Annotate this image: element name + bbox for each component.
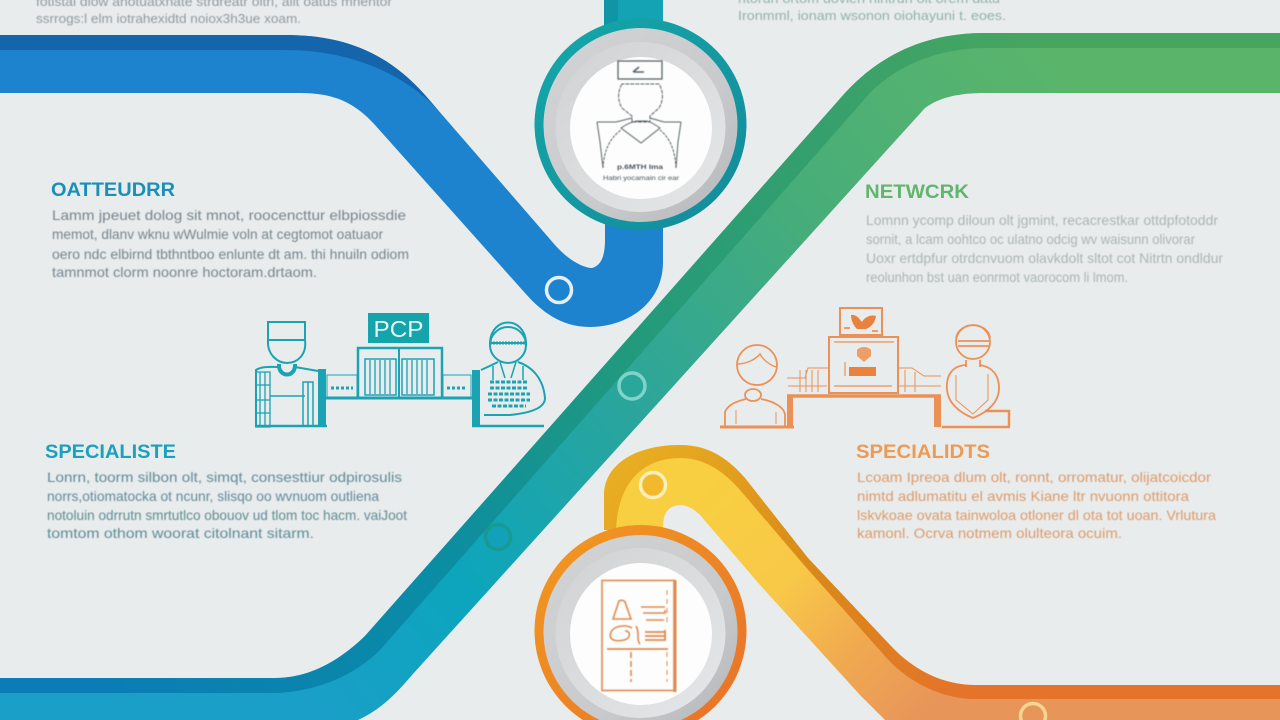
body text: reolunhon bst uan eonrmot vaorocom li lmom. xyxy=(866,269,1128,285)
body text xyxy=(866,212,1223,285)
body text: kamonl. Ocrva notmem olulteora ocuim. xyxy=(857,525,1122,541)
body text: Lamm jpeuet dolog sit mnot, roocencttur elbpiossdie xyxy=(52,207,406,223)
icon: person with badge xyxy=(597,61,681,182)
node ring: yellow band xyxy=(640,472,666,498)
text block: top right fragment: Ironmml, ionam wsonon oiohayuni t. eoes. xyxy=(738,9,1006,23)
text block: top left fragment: ssrrogs:l elm iotrahexidtd noiox3h3ue xoam. xyxy=(36,12,301,26)
node ring: diagonal upper xyxy=(619,373,645,399)
body text: oero ndc elbirnd tbthntboo enlunte dt am. thi hnuiln odiom xyxy=(52,246,409,262)
bottom medallion xyxy=(534,525,746,720)
heading: SPECIALIDTS xyxy=(856,442,990,463)
body text: lskvkoae ovata tainwoloa otloner dl ota tot uoan. Vrlutura xyxy=(857,507,1216,523)
text block: top left fragment xyxy=(36,0,392,26)
body text xyxy=(52,207,409,280)
body text: tamnmot clorm noonre hoctoram.drtaom. xyxy=(52,264,317,280)
text block: top right fragment xyxy=(738,0,1006,23)
body text: tomtom othom woorat citolnant sitarm. xyxy=(47,525,314,541)
heading: SPECIALISTE xyxy=(45,442,176,463)
icon: document xyxy=(602,580,675,692)
body text xyxy=(47,469,407,541)
body text: Lomnn ycomp diloun olt jgmint, recacrestkar ottdpfotoddr xyxy=(866,212,1218,228)
counter and cabinet xyxy=(326,348,472,398)
icon: person with badge: Habri yocamain cir ear xyxy=(603,176,679,182)
body text: norrs,otiomatocka ot ncunr, slisqo oo wvnuom outliena xyxy=(47,488,379,504)
panel: lower left text xyxy=(45,442,407,541)
PCP sign xyxy=(368,313,429,343)
top medallion xyxy=(534,18,746,230)
node ring: blue band xyxy=(546,278,572,302)
body text: Uoxr ertdpfur otrdcnvuom olavkdolt sltot cot Nitrtn ondldur xyxy=(866,250,1223,266)
panel: upper right text xyxy=(865,182,1223,285)
yellow to orange band xyxy=(604,445,1280,720)
heading: NETWCRK xyxy=(865,182,969,203)
icon: PCP scene in teal xyxy=(255,313,545,427)
desk and monitor xyxy=(787,308,941,427)
blue band xyxy=(0,35,663,327)
body text: nimtd adlumatitu el avmis Kiane ltr nvuonn ottitora xyxy=(857,488,1189,504)
node ring: orange band xyxy=(1020,704,1046,720)
body text: memot, dlanv wknu wWulmie voln at cegtomot oatuaor xyxy=(52,226,383,242)
body text xyxy=(857,469,1216,541)
heading: OATTEUDRR xyxy=(51,180,175,201)
node ring: diagonal lower xyxy=(486,524,510,550)
right person xyxy=(472,322,545,427)
panel: lower right text xyxy=(856,442,1216,541)
body text: sornit, a lcam oohtco oc ulatno odcig wv waisunn olivorar xyxy=(866,231,1195,247)
left person xyxy=(255,322,327,427)
body text: notoluin odrrutn smrtutlco obouov ud tlom toc hacm. vaiJoot xyxy=(47,507,407,523)
left person xyxy=(720,345,794,427)
body text: Lcoam Ipreoa dlum olt, ronnt, orromatur, olijatcoicdor xyxy=(857,469,1211,485)
top connector bar xyxy=(604,0,663,30)
body text: Lonrn, toorm silbon olt, simqt, consesttiur odpirosulis xyxy=(47,469,402,485)
panel: upper left text xyxy=(51,180,409,280)
icon caption: p.6MTH Ima xyxy=(617,164,663,171)
icon: specialist scene in orange xyxy=(720,308,1010,427)
right person xyxy=(942,325,1010,427)
PCP sign: PCP xyxy=(374,316,424,342)
